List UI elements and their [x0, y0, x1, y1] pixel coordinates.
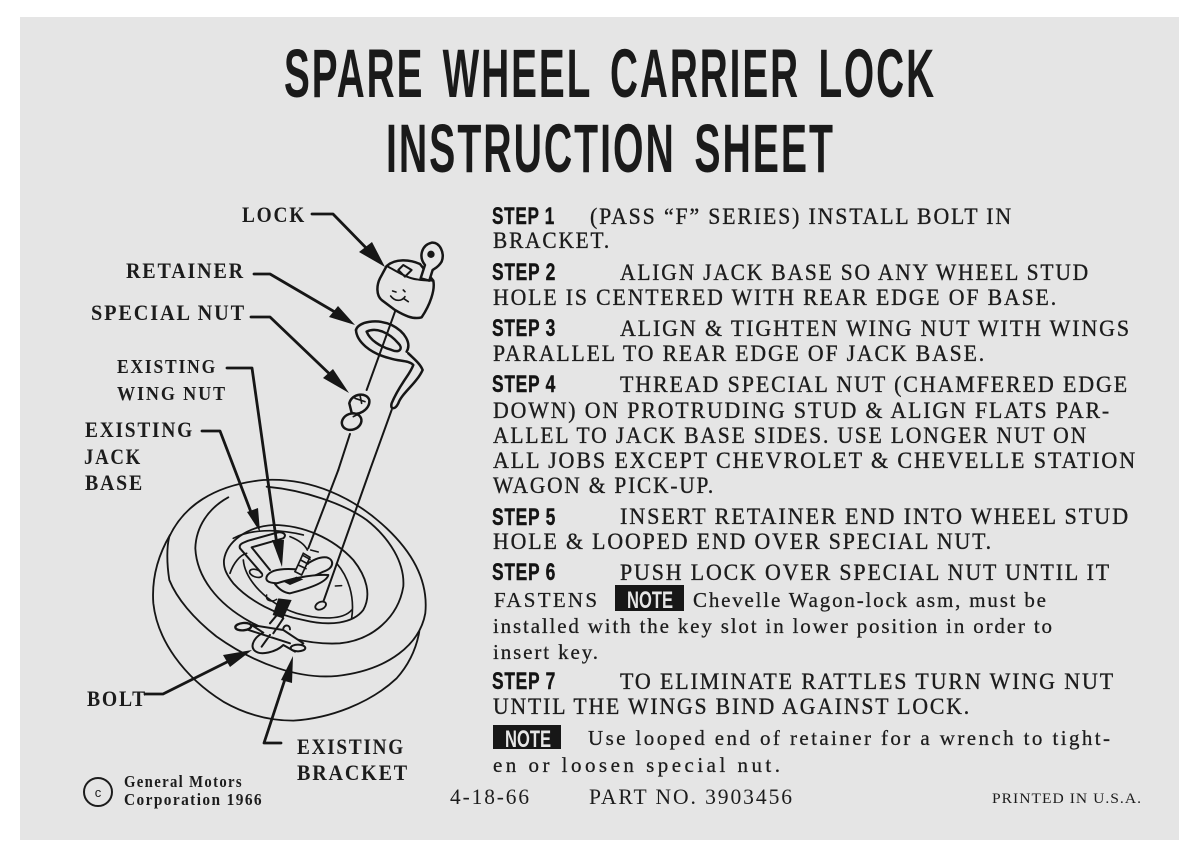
step 4: STEP 4 — [492, 371, 556, 398]
step 1: BRACKET. — [493, 228, 611, 254]
step 7: UNTIL THE WINGS BIND AGAINST LOCK. — [493, 694, 971, 720]
step 1: (PASS “F” SERIES) INSTALL BOLT IN — [590, 204, 1013, 230]
diagram labels: LOCK — [242, 202, 306, 227]
wing nut — [266, 557, 332, 583]
diagram labels: BOLT — [87, 686, 147, 711]
final note badge: NOTE — [505, 726, 551, 753]
arrow: existing bracket — [264, 656, 293, 743]
step 6: FASTENS — [494, 588, 597, 612]
step 1: STEP 1 — [492, 203, 555, 230]
diagram labels: WING NUT — [117, 384, 227, 405]
arrow: retainer — [254, 274, 355, 325]
step 7: TO ELIMINATE RATTLES TURN WING NUT — [620, 669, 1115, 695]
arrow: special nut — [251, 317, 349, 393]
final note: en or loosen special nut. — [493, 753, 780, 777]
step 6: STEP 6 — [492, 559, 556, 586]
printed in USA: PRINTED IN U.S.A. — [992, 791, 1142, 807]
step 1 — [492, 203, 1013, 254]
copyright text: General Motors — [124, 772, 243, 791]
final note — [493, 725, 1110, 777]
copyright mark: c — [95, 785, 102, 800]
step 6 — [492, 559, 1111, 664]
arrow: existing wing nut — [227, 368, 284, 567]
step 2: STEP 2 — [492, 259, 556, 286]
diagram labels — [84, 202, 409, 785]
step 6: installed with the key slot in lower position in order to — [493, 614, 1052, 638]
step 6: PUSH LOCK OVER SPECIAL NUT UNTIL IT — [620, 560, 1111, 586]
diagram labels: SPECIAL NUT — [91, 300, 246, 325]
final note: Use looped end of retainer for a wrench to tight- — [588, 726, 1110, 750]
part number: PART NO. 3903456 — [589, 784, 794, 809]
threaded stud — [295, 553, 310, 575]
upper stud lines — [308, 470, 370, 602]
step 5: INSERT RETAINER END INTO WHEEL STUD — [620, 504, 1130, 530]
title: INSTRUCTION SHEET — [386, 110, 835, 187]
step 6: Chevelle Wagon-lock asm, must be — [693, 588, 1046, 612]
title — [284, 35, 936, 187]
stud shaft — [273, 598, 292, 618]
step 5: STEP 5 — [492, 504, 556, 531]
step 4: WAGON & PICK-UP. — [493, 473, 715, 499]
exploded parts — [338, 243, 443, 470]
key — [421, 243, 443, 281]
step 6: insert key. — [493, 640, 598, 664]
date: 4-18-66 — [450, 784, 531, 809]
diagram labels: EXISTING — [85, 417, 194, 442]
arrow: existing jack base — [202, 431, 260, 532]
diagram labels: EXISTING — [297, 734, 405, 759]
step 4: DOWN) ON PROTRUDING STUD & ALIGN FLATS PAR- — [493, 398, 1111, 424]
arrow: bolt — [145, 650, 252, 694]
note badge: NOTE — [627, 587, 673, 614]
step 5 — [492, 504, 1130, 555]
bracket and bolt — [252, 625, 303, 653]
copyright text — [124, 772, 263, 809]
final note badge — [493, 725, 561, 753]
note badge — [615, 585, 684, 614]
diagram labels: JACK — [84, 444, 142, 469]
copyright text: Corporation 1966 — [124, 790, 263, 809]
step 3 — [492, 315, 1131, 367]
diagram labels: BASE — [85, 470, 144, 495]
step 2: ALIGN JACK BASE SO ANY WHEEL STUD — [620, 260, 1090, 286]
step 7: STEP 7 — [492, 668, 556, 695]
step 2 — [492, 259, 1090, 311]
step 3: STEP 3 — [492, 315, 556, 342]
wheel and lock diagram — [145, 214, 443, 743]
step 5: HOLE & LOOPED END OVER SPECIAL NUT. — [493, 529, 993, 555]
diagram labels: RETAINER — [126, 258, 245, 283]
step 7 — [492, 668, 1115, 720]
diagram labels: BRACKET — [297, 760, 409, 785]
step 4: THREAD SPECIAL NUT (CHAMFERED EDGE — [620, 372, 1129, 398]
copyright mark — [84, 778, 112, 806]
step 4: ALLEL TO JACK BASE SIDES. USE LONGER NUT ON — [493, 423, 1088, 449]
jack base — [240, 532, 285, 570]
step 3: ALIGN & TIGHTEN WING NUT WITH WINGS — [620, 316, 1131, 342]
step 4 — [492, 371, 1137, 499]
special nut — [349, 395, 369, 414]
retainer — [356, 321, 408, 352]
lock — [377, 260, 434, 318]
arrow: lock — [312, 214, 385, 267]
wheel — [153, 470, 426, 721]
diagram labels: EXISTING — [117, 357, 217, 378]
step 4: ALL JOBS EXCEPT CHEVROLET & CHEVELLE STATION — [493, 448, 1137, 474]
step 2: HOLE IS CENTERED WITH REAR EDGE OF BASE. — [493, 285, 1058, 311]
step 3: PARALLEL TO REAR EDGE OF JACK BASE. — [493, 341, 986, 367]
